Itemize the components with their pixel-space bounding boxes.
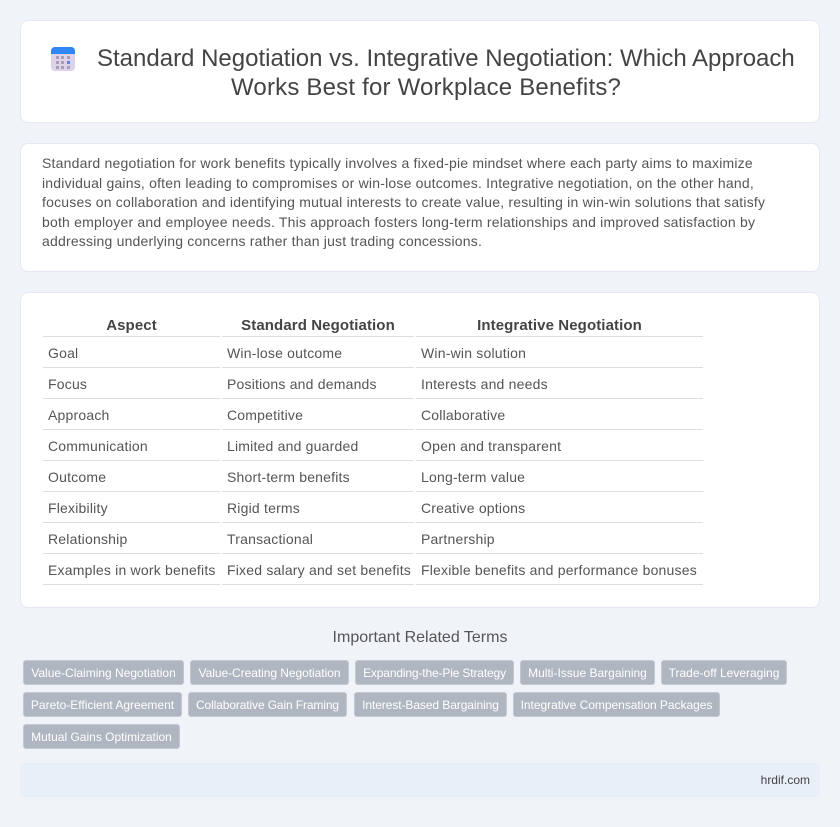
title (97, 45, 795, 101)
comparison table: Interests and needs (421, 376, 548, 392)
panel: header (20, 20, 820, 123)
comparison table: Positions and demands (227, 376, 377, 392)
comparison table: Open and transparent (421, 438, 561, 454)
related terms tags: Expanding-the-Pie Strategy (363, 666, 506, 680)
related terms tags (23, 660, 787, 749)
related terms tags: Mutual Gains Optimization (31, 730, 172, 744)
related terms tags: Collaborative Gain Framing (196, 698, 339, 712)
comparison table: Communication (48, 438, 148, 454)
comparison table: Focus (48, 376, 87, 392)
comparison table: Flexibility (48, 500, 108, 516)
footer source: hrdif.com (761, 773, 810, 787)
related terms tags: Value-Creating Negotiation (199, 666, 340, 680)
text block: introduction: Standard negotiation for work benefits typically involves a fixed-pie mindset where each party aims to maximize (42, 155, 753, 171)
text block: introduction (42, 155, 765, 249)
comparison table: Examples in work benefits (48, 562, 216, 578)
comparison table: Creative options (421, 500, 525, 516)
comparison table: Fixed salary and set benefits (227, 562, 411, 578)
comparison table: Flexible benefits and performance bonuses (421, 562, 697, 578)
comparison table: Standard Negotiation (241, 317, 395, 334)
text block: introduction: addressing underlying concerns rather than just trading concessions. (42, 233, 482, 249)
comparison table: Partnership (421, 531, 495, 547)
comparison table: Transactional (227, 531, 313, 547)
title: Works Best for Workplace Benefits? (231, 74, 621, 101)
text block: introduction: both employer and employee needs. This approach fosters long-term relationships and improved satisfaction by (42, 214, 755, 230)
related terms tags: Trade-off Leveraging (669, 666, 779, 680)
footer bar (20, 763, 820, 797)
related terms tags: Value-Claiming Negotiation (31, 666, 176, 680)
comparison table: Rigid terms (227, 500, 300, 516)
comparison table: Aspect (106, 317, 157, 334)
comparison table: Competitive (227, 407, 303, 423)
comparison table: Integrative Negotiation (477, 317, 642, 334)
related terms tags: Multi-Issue Bargaining (528, 666, 647, 680)
panel: introduction (20, 143, 820, 272)
related terms tags: Pareto-Efficient Agreement (31, 698, 174, 712)
comparison table: Goal (48, 345, 78, 361)
comparison table: Long-term value (421, 469, 525, 485)
comparison table: Limited and guarded (227, 438, 358, 454)
text block: introduction: focuses on collaboration and identifying mutual interests to create value, resulting in win-win solutions that satisfy (42, 194, 765, 210)
comparison table (43, 317, 703, 585)
comparison table: Collaborative (421, 407, 505, 423)
text block: introduction: individual gains, often leading to compromises or win-lose outcomes. Integrative negotiation, on the other hand, (42, 175, 754, 191)
related terms tags: Interest-Based Bargaining (362, 698, 499, 712)
comparison table: Short-term benefits (227, 469, 350, 485)
comparison table: Win-win solution (421, 345, 526, 361)
related terms tags: Integrative Compensation Packages (521, 698, 712, 712)
heading: related terms: Important Related Terms (333, 629, 507, 646)
panel: comparison table (20, 292, 820, 608)
comparison table: Relationship (48, 531, 127, 547)
comparison table: Outcome (48, 469, 106, 485)
title: Standard Negotiation vs. Integrative Negotiation: Which Approach (97, 45, 795, 72)
comparison table: Approach (48, 407, 110, 423)
comparison table: Win-lose outcome (227, 345, 342, 361)
icon: calendar (51, 47, 75, 71)
